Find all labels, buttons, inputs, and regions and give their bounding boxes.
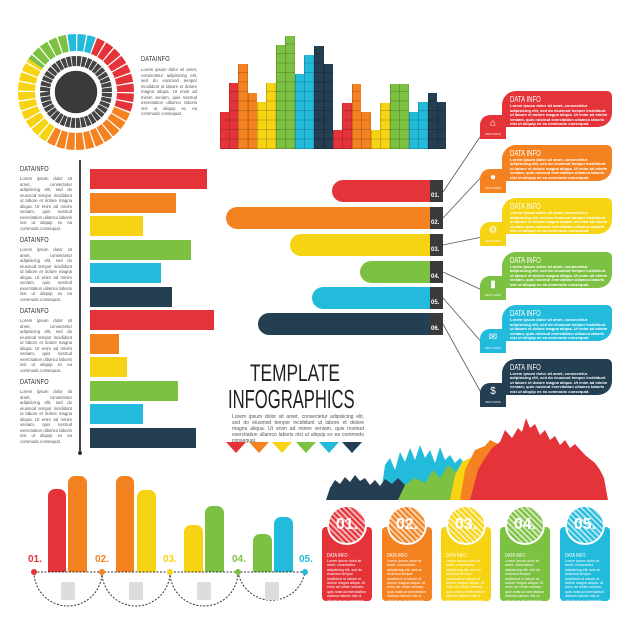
pill bars: 04.	[431, 274, 439, 280]
bottom cards: DATA INFO	[505, 553, 526, 559]
card 1: INFO DATA	[485, 132, 501, 136]
bottom cards: 03.	[455, 516, 477, 533]
bottom cards: 01.	[336, 516, 358, 533]
title: Lorem ipsum dolor sit amet, consectetur adipisicing elit, sed do eiusmod tempor incididunt ut labore et dolore magna aliqua. Ut enim ad minim veniam, quis nostrud exercitation ullamco laboris nisi ut aliquip ex ea commodo consequat.	[232, 414, 364, 444]
card 1	[480, 91, 612, 139]
mountain chart	[326, 418, 608, 500]
data cards	[480, 91, 612, 407]
triangles	[226, 442, 362, 453]
bottom bar chart: 01.	[28, 554, 42, 565]
card 1: DATA INFO	[510, 95, 541, 104]
pill bars: 02.	[431, 220, 439, 226]
pill bars: 03.	[431, 247, 439, 253]
card 4: ▮	[490, 278, 496, 290]
left text column: Lorem ipsum dolor sit amet, consectetur adipisicing elit, sed do eiusmod tempor incididunt ut labore et dolore magna aliqua. Ut enim ad minim veniam, quis nostrud exercitation ullamco laboris nisi ut aliquip ex ea commodo consequat.	[20, 247, 72, 302]
pill bars: 06.	[431, 326, 439, 332]
card 4	[480, 252, 612, 300]
left text column: DATAINFO	[20, 379, 49, 386]
bottom cards: DATA INFO	[327, 553, 348, 559]
card 6: INFO DATA	[485, 400, 501, 404]
horizontal bar chart	[78, 160, 214, 455]
left text column	[20, 166, 72, 444]
card 6: DATA INFO	[510, 362, 541, 372]
pixel bar chart 2	[333, 84, 446, 149]
bottom cards: Lorem ipsum dolor sit amet, consectetur adipisicing elit, sed do eiusmod tempor incididunt ut labore et dolore magna aliqua. Ut enim ad minim veniam, quis nostrud exercitation ullamco laboris nisi ut aliquip ex ea commodo consequat.	[505, 559, 544, 607]
card 3: DATA INFO	[510, 202, 541, 211]
card 5: INFO DATA	[485, 346, 501, 350]
card 5	[480, 305, 612, 353]
bottom cards: Lorem ipsum dolor sit amet, consectetur adipisicing elit, sed do eiusmod tempor incididunt ut labore et dolore magna aliqua. Ut enim ad minim veniam, quis nostrud exercitation ullamco laboris nisi ut aliquip ex ea commodo consequat.	[446, 559, 485, 607]
bottom cards: DATA INFO	[446, 553, 467, 559]
bottom bar chart: 03.	[163, 554, 177, 565]
left text column: DATAINFO	[20, 166, 49, 173]
card 3: Lorem ipsum dolor sit amet, consectetur adipisicing elit, sed do eiusmod tempor incididunt ut labore et dolore magna aliqua. Ut enim ad minim veniam, quis nostrud exercitation ullamco laboris nisi ut aliquip ex ea commodo consequat.	[510, 210, 607, 233]
left text column: Lorem ipsum dolor sit amet, consectetur adipisicing elit, sed do eiusmod tempor incididunt ut labore et dolore magna aliqua. Ut enim ad minim veniam, quis nostrud exercitation ullamco laboris nisi ut aliquip ex ea commodo consequat.	[20, 176, 72, 230]
left text column: DATAINFO	[20, 308, 49, 315]
card 6: Lorem ipsum dolor sit amet, consectetur adipisicing elit, sed do eiusmod tempor incididunt ut labore et dolore magna aliqua. Ut enim ad minim veniam, quis nostrud exercitation ullamco laboris nisi ut aliquip ex ea commodo consequat.	[510, 370, 607, 394]
card 3: ⚙	[489, 225, 497, 236]
left text column: DATAINFO	[20, 237, 49, 244]
pixel bar chart 1	[220, 36, 333, 149]
card 2: INFO DATA	[485, 186, 501, 190]
pill bars: 05.	[431, 300, 439, 306]
bottom cards: Lorem ipsum dolor sit amet, consectetur adipisicing elit, sed do eiusmod tempor incididunt ut labore et dolore magna aliqua. Ut enim ad minim veniam, quis nostrud exercitation ullamco laboris nisi ut aliquip ex ea commodo consequat.	[387, 559, 426, 607]
card 3: INFO DATA	[485, 239, 501, 243]
bottom cards: DATA INFO	[565, 553, 586, 559]
bottom cards: DATA INFO	[387, 553, 408, 559]
card 2: ●	[490, 172, 496, 182]
bottom cards: 05.	[574, 516, 596, 533]
card 5: ✉	[489, 332, 497, 343]
bottom bar chart	[28, 476, 313, 606]
card 6	[480, 359, 612, 407]
card 4: Lorem ipsum dolor sit amet, consectetur adipisicing elit, sed do eiusmod tempor incididunt ut labore et dolore magna aliqua. Ut enim ad minim veniam, quis nostrud exercitation ullamco laboris nisi ut aliquip ex ea commodo consequat.	[510, 264, 607, 286]
title: TEMPLATE	[250, 360, 340, 387]
data info top: Lorem ipsum dolor sit amet, consectetur adipisicing elit, sed do eiusmod tempor incididunt ut labore et dolore magna aliqua. Ut enim ad minim veniam, quis nostrud exercitation ullamco laboris nisi ut aliquip ex ea commodo consequat.	[141, 67, 197, 116]
card 6: $	[490, 386, 496, 396]
circular chart	[18, 34, 134, 150]
pill bars: 01.	[431, 193, 439, 199]
pill bars	[226, 180, 443, 335]
card 4: INFO DATA	[485, 292, 501, 296]
card 3	[480, 198, 612, 246]
bottom bar chart: 04.	[232, 554, 246, 565]
bottom cards: 04.	[514, 516, 536, 533]
title	[228, 360, 364, 444]
card 4: DATA INFO	[510, 256, 541, 264]
bottom cards	[322, 507, 610, 607]
bottom cards: Lorem ipsum dolor sit amet, consectetur adipisicing elit, sed do eiusmod tempor incididunt ut labore et dolore magna aliqua. Ut enim ad minim veniam, quis nostrud exercitation ullamco laboris nisi ut aliquip ex ea commodo consequat.	[327, 559, 366, 607]
card 5: DATA INFO	[510, 309, 541, 318]
bottom cards: 02.	[396, 516, 418, 533]
card 2: Lorem ipsum dolor sit amet, consectetur adipisicing elit, sed do eiusmod tempor incididunt ut labore et dolore magna aliqua. Ut enim ad minim veniam, quis nostrud exercitation ullamco laboris nisi ut aliquip ex ea commodo consequat.	[510, 156, 607, 180]
card 1: Lorem ipsum dolor sit amet, consectetur adipisicing elit, sed do eiusmod tempor incididunt ut labore et dolore magna aliqua. Ut enim ad minim veniam, quis nostrud exercitation ullamco laboris nisi ut aliquip ex ea commodo consequat.	[510, 103, 607, 126]
card 5: Lorem ipsum dolor sit amet, consectetur adipisicing elit, sed do eiusmod tempor incididunt ut labore et dolore magna aliqua. Ut enim ad minim veniam, quis nostrud exercitation ullamco laboris nisi ut aliquip ex ea commodo consequat.	[510, 317, 607, 340]
bottom bar chart: 05.	[299, 554, 313, 565]
title: INFOGRAPHICS	[228, 384, 355, 414]
bottom cards: Lorem ipsum dolor sit amet, consectetur adipisicing elit, sed do eiusmod tempor incididunt ut labore et dolore magna aliqua. Ut enim ad minim veniam, quis nostrud exercitation ullamco laboris nisi ut aliquip ex ea commodo consequat.	[565, 559, 604, 607]
left text column: Lorem ipsum dolor sit amet, consectetur adipisicing elit, sed do eiusmod tempor incididunt ut labore et dolore magna aliqua. Ut enim ad minim veniam, quis nostrud exercitation ullamco laboris nisi ut aliquip ex ea commodo consequat.	[20, 318, 72, 372]
card 2	[480, 145, 612, 193]
bottom bar chart: 02.	[95, 554, 109, 565]
data info top: DATAINFO	[141, 56, 170, 63]
card 2: DATA INFO	[510, 148, 541, 158]
card 1: ⌂	[490, 118, 496, 129]
left text column: Lorem ipsum dolor sit amet, consectetur adipisicing elit, sed do eiusmod tempor incididunt ut labore et dolore magna aliqua. Ut enim ad minim veniam, quis nostrud exercitation ullamco laboris nisi ut aliquip ex ea commodo consequat.	[20, 389, 72, 444]
